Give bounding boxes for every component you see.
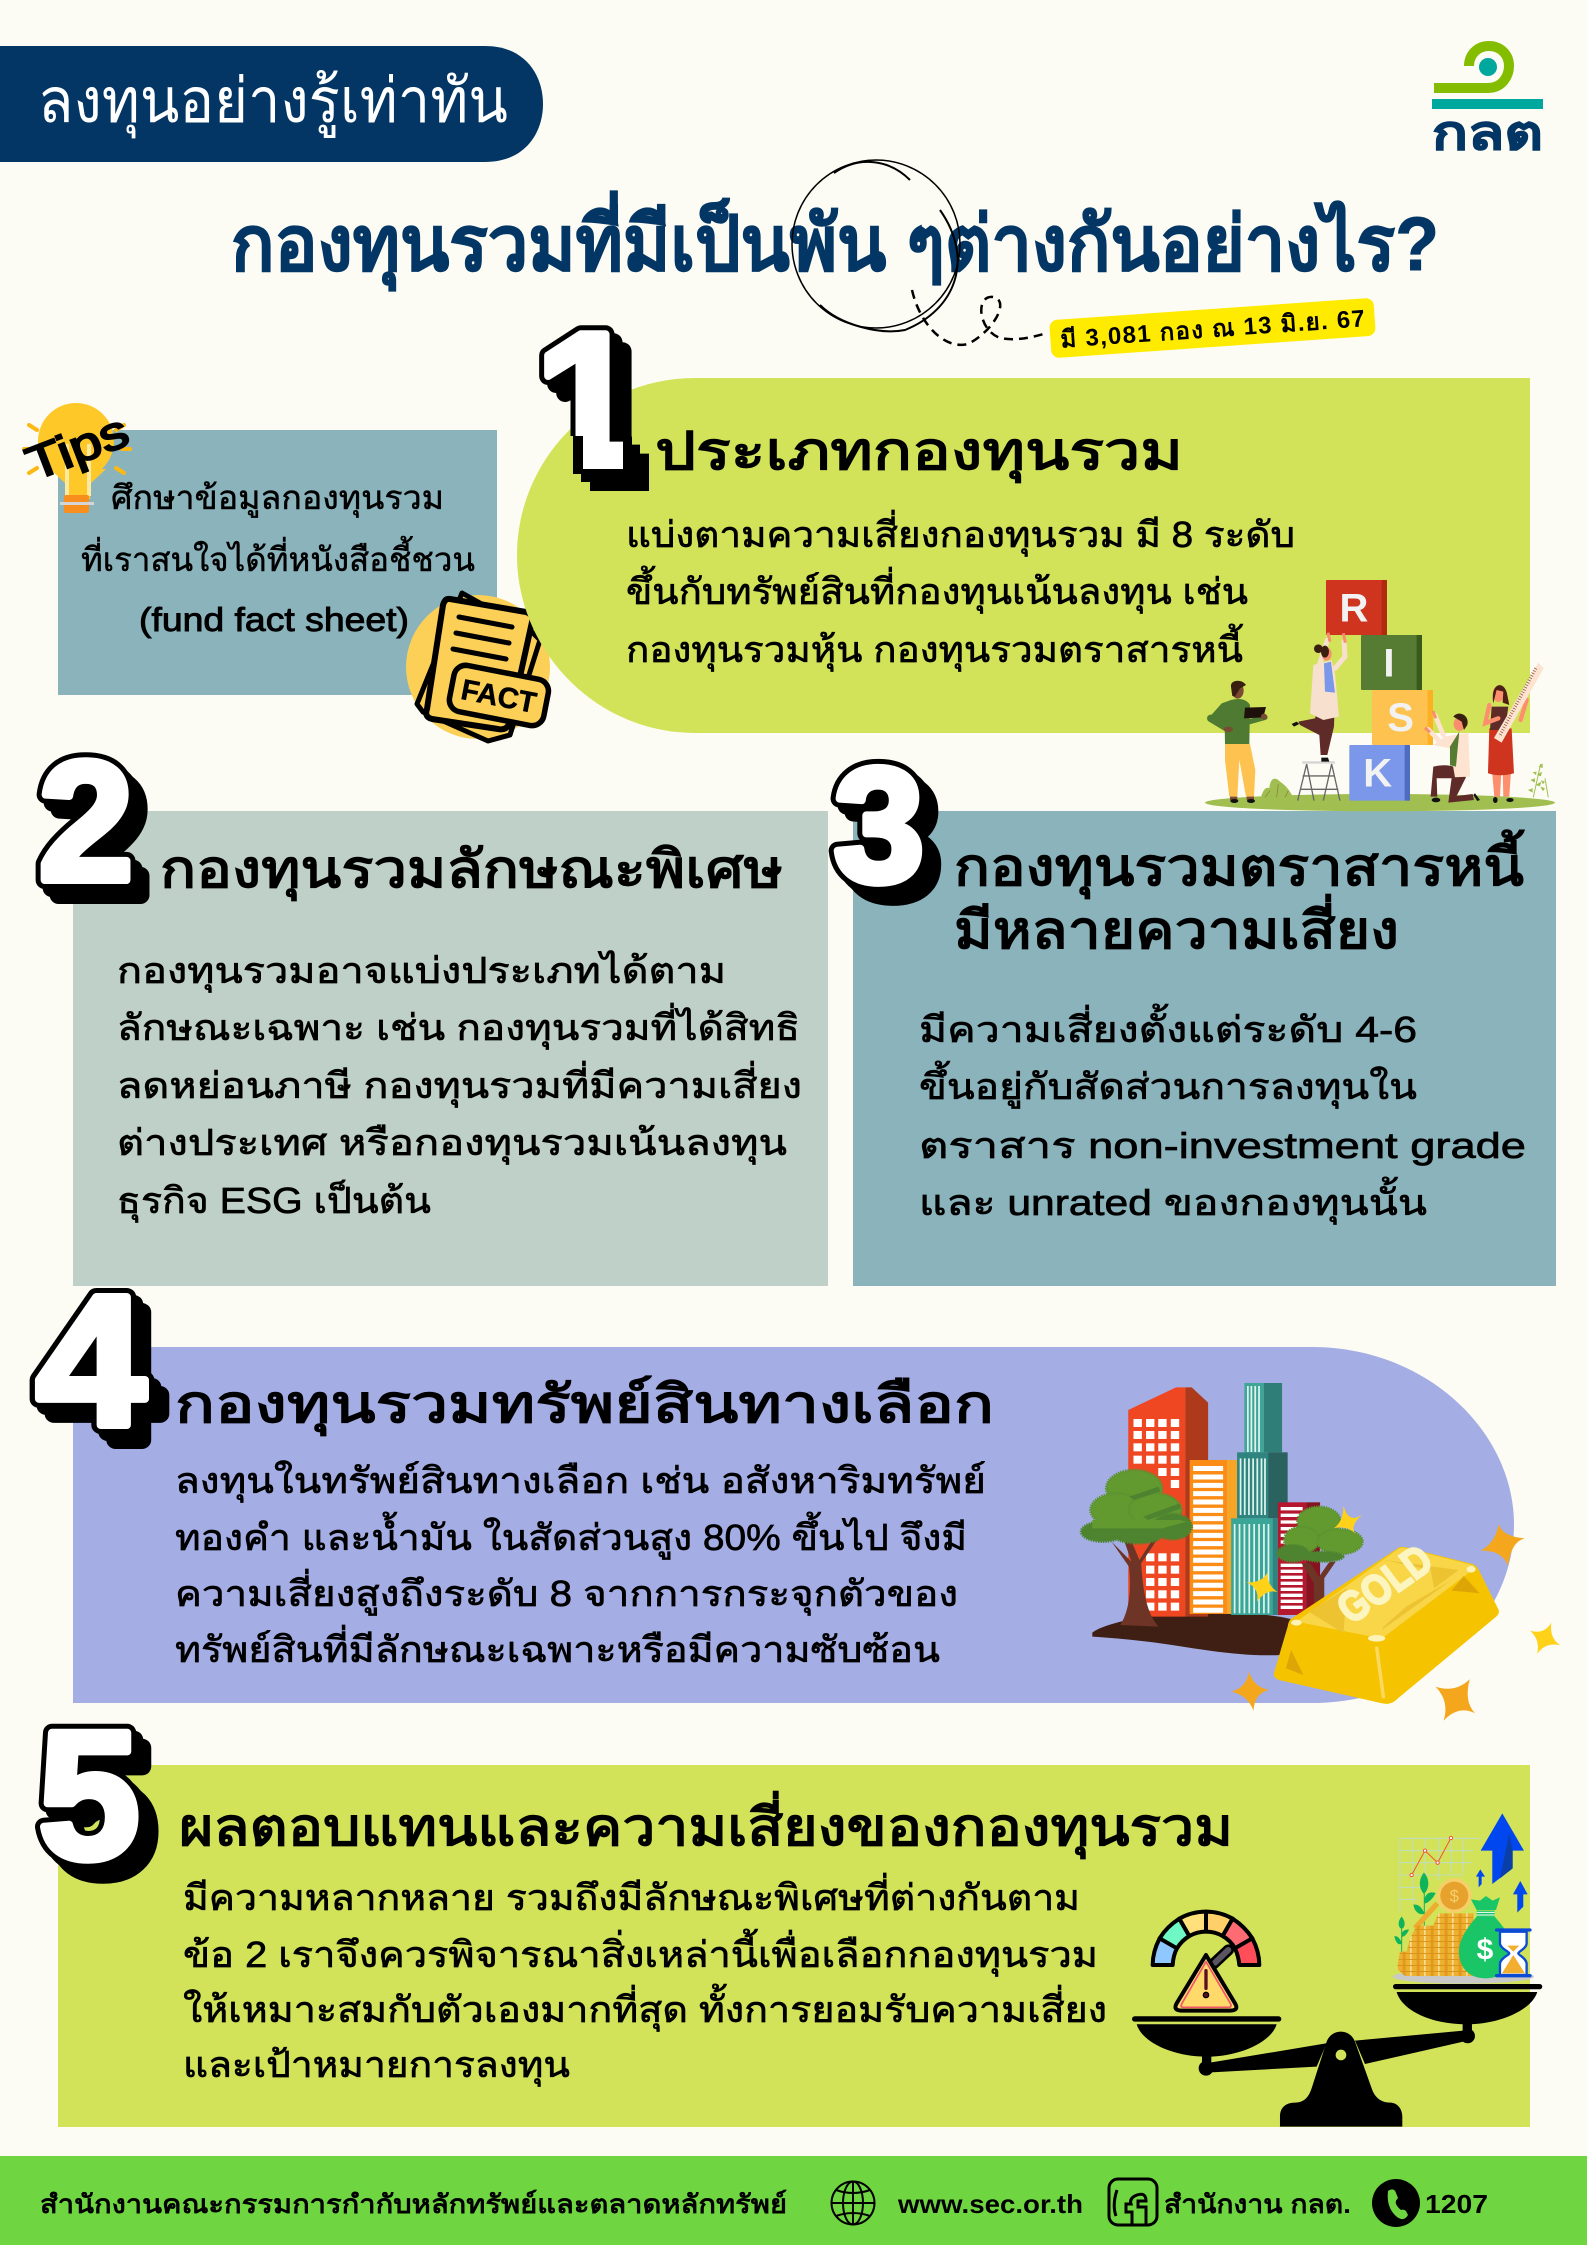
numeral 5: 5 — [53, 1708, 155, 1912]
body text 5: ให้เหมาะสมกับตัวเองมากที่สุด ทั้งการยอมรับความเสี่ยง — [183, 1983, 1107, 2032]
illustration: gold bar and sparkles: GOLD — [1328, 1536, 1441, 1632]
heading 3: มีหลายความเสี่ยง — [954, 894, 1399, 960]
icon: growth chart, coins, money bag and hourglass: $ — [1450, 1887, 1459, 1906]
body text 2: ลักษณะเฉพาะ เช่น กองทุนรวมที่ได้สิทธิ — [117, 1003, 800, 1050]
icon: fact sheet document: FACT — [458, 674, 539, 720]
body text 4: ทรัพย์สินที่มีลักษณะเฉพาะหรือมีความซับซ้อน — [175, 1625, 940, 1670]
panel 3: bond funds — [853, 811, 1556, 1286]
person with tablet — [1208, 681, 1267, 803]
numeral 2: 2 — [39, 727, 133, 917]
main title: กองทุนรวมที่มีเป็นพัน ๆต่างกันอย่างไร? — [231, 190, 1439, 292]
numeral 4: 4 — [36, 1256, 146, 1465]
footer bar — [0, 2156, 1587, 2245]
footer: facebook page name: สำนักงาน กลต. — [1164, 2189, 1351, 2219]
block S: S — [1387, 696, 1414, 740]
body text 1: แบ่งตามความเสี่ยงกองทุนรวม มี 8 ระดับ — [626, 510, 1295, 557]
icon: facebook — [1109, 2179, 1157, 2225]
numeral 3: 3 — [834, 735, 924, 916]
icon: growth chart, coins, money bag and hourglass — [1393, 1813, 1534, 1984]
block S — [1372, 690, 1433, 745]
icon: risk gauge with warning — [1153, 1912, 1259, 2011]
body text 3 — [919, 1003, 1526, 1225]
header pill: series label: ลงทุนอย่างรู้เท่าทัน — [38, 67, 508, 138]
numeral 2: 2 — [46, 735, 140, 925]
icon: tips light bulb — [24, 403, 130, 513]
block R: R — [1340, 587, 1369, 631]
block K — [1349, 745, 1410, 801]
block I — [1361, 635, 1422, 690]
numeral 2: 2 — [53, 742, 147, 932]
doodle: circle around title word and dashed trail — [792, 160, 1047, 345]
heading 1: ประเภทกองทุนรวม — [655, 423, 1183, 484]
numeral 1: 1 — [543, 302, 649, 514]
person with ruler — [1485, 663, 1544, 803]
body text 2: ต่างประเทศ หรือกองทุนรวมเน้นลงทุน — [117, 1122, 787, 1165]
body text 2 — [117, 950, 802, 1223]
numeral 3: 3 — [848, 749, 938, 930]
body text 2: ลดหย่อนภาษี กองทุนรวมที่มีความเสี่ยง — [117, 1061, 802, 1108]
panel: tips — [58, 430, 497, 695]
illustration: people stacking RISK blocks — [1205, 580, 1555, 811]
panel: tips: ที่เราสนใจได้ที่หนังสือชี้ชวน — [81, 536, 475, 578]
icon: growth chart, coins, money bag and hourglass: $ — [1477, 1933, 1494, 1966]
icon: globe — [832, 2181, 874, 2225]
body text 1: กองทุนรวมหุ้น กองทุนรวมตราสารหนี้ — [626, 623, 1244, 672]
heading 4: กองทุนรวมทรัพย์สินทางเลือก — [175, 1375, 994, 1437]
panel 4: alternative asset funds — [73, 1347, 1514, 1703]
numeral 4: 4 — [51, 1271, 161, 1480]
panel 5: returns and risk — [58, 1765, 1530, 2127]
panel 1: fund types — [517, 378, 1530, 733]
panel 2: special funds — [73, 811, 828, 1286]
body text 2: กองทุนรวมอาจแบ่งประเภทได้ตาม — [117, 950, 726, 993]
body text 3: ตราสาร non-investment grade — [919, 1125, 1526, 1166]
label: Tips: Tips — [19, 403, 136, 490]
block K: K — [1363, 752, 1392, 796]
tree large — [1081, 1470, 1192, 1627]
numeral 3: 3 — [841, 742, 931, 923]
footer: hotline: 1207 — [1425, 2189, 1488, 2219]
block R — [1326, 580, 1387, 635]
logo: SEC: กลต — [1432, 106, 1543, 159]
body text 5: และเป้าหมายการลงทุน — [183, 2044, 570, 2087]
heading 3: กองทุนรวมตราสารหนี้ — [954, 829, 1525, 900]
body text 5: มีความหลากหลาย รวมถึงมีลักษณะพิเศษที่ต่างกันตาม — [183, 1873, 1080, 1918]
numeral 4: 4 — [43, 1263, 153, 1472]
body text 1: ขึ้นกับทรัพย์สินที่กองทุนเน้นลงทุน เช่น — [626, 565, 1248, 614]
numeral 5: 5 — [45, 1700, 147, 1904]
illustration: city buildings with trees — [1081, 1383, 1363, 1655]
footer: organisation name: สำนักงานคณะกรรมการกำกับหลักทรัพย์และตลาดหลักทรัพย์ — [40, 2189, 787, 2219]
body text 4: ลงทุนในทรัพย์สินทางเลือก เช่น อสังหาริมทรัพย์ — [175, 1460, 986, 1503]
body text 5: ข้อ 2 เราจึงควรพิจารณาสิ่งเหล่านี้เพื่อเลือกกองทุนรวม — [183, 1928, 1098, 1977]
body text 3: มีความเสี่ยงตั้งแต่ระดับ 4-6 — [919, 1003, 1417, 1050]
body text 5 — [183, 1873, 1107, 2087]
heading 3 — [954, 829, 1525, 960]
numeral 4: 4 — [36, 1256, 146, 1465]
body text 3: ขึ้นอยู่กับสัดส่วนการลงทุนใน — [919, 1060, 1417, 1109]
numeral 5: 5 — [38, 1693, 140, 1897]
heading 2: กองทุนรวมลักษณะพิเศษ — [160, 841, 783, 902]
body text 4 — [175, 1460, 986, 1670]
body text 4: ทองคำ และน้ำมัน ในสัดส่วนสูง 80% ขึ้นไป จึงมี — [175, 1511, 967, 1560]
numeral 1: 1 — [535, 294, 641, 506]
footer: website: www.sec.or.th — [897, 2189, 1083, 2219]
header pill: series label — [0, 46, 543, 162]
heading 5: ผลตอบแทนและความเสี่ยงของกองทุนรวม — [179, 1791, 1233, 1860]
icon: fact sheet document — [406, 593, 551, 741]
icon: phone — [1372, 2179, 1420, 2227]
numeral 1: 1 — [552, 311, 658, 523]
numeral 3: 3 — [834, 735, 924, 916]
kneeling person — [1425, 711, 1480, 803]
tree small — [1277, 1507, 1363, 1603]
body text 3: และ unrated ของกองทุนนั้น — [919, 1176, 1427, 1225]
panel: tips: ศึกษาข้อมูลกองทุนรวม — [111, 479, 444, 518]
numeral 2: 2 — [39, 727, 133, 917]
body text 4: ความเสี่ยงสูงถึงระดับ 8 จากการกระจุกตัวของ — [175, 1569, 958, 1616]
numeral 5: 5 — [38, 1693, 140, 1897]
tag: number of funds: มี 3,081 กอง ณ 13 มิ.ย. 67 — [1060, 305, 1366, 354]
illustration: balance scale — [1135, 1813, 1540, 2127]
panel: tips: (fund fact sheet) — [139, 601, 409, 638]
illustration: gold bar and sparkles — [1231, 1506, 1560, 1721]
body text 2: ธุรกิจ ESG เป็นต้น — [117, 1178, 431, 1223]
logo: SEC — [1432, 46, 1543, 159]
block I: I — [1383, 642, 1395, 686]
person on stepladder — [1292, 633, 1345, 801]
body text 1 — [626, 510, 1295, 672]
numeral 1: 1 — [535, 294, 641, 506]
